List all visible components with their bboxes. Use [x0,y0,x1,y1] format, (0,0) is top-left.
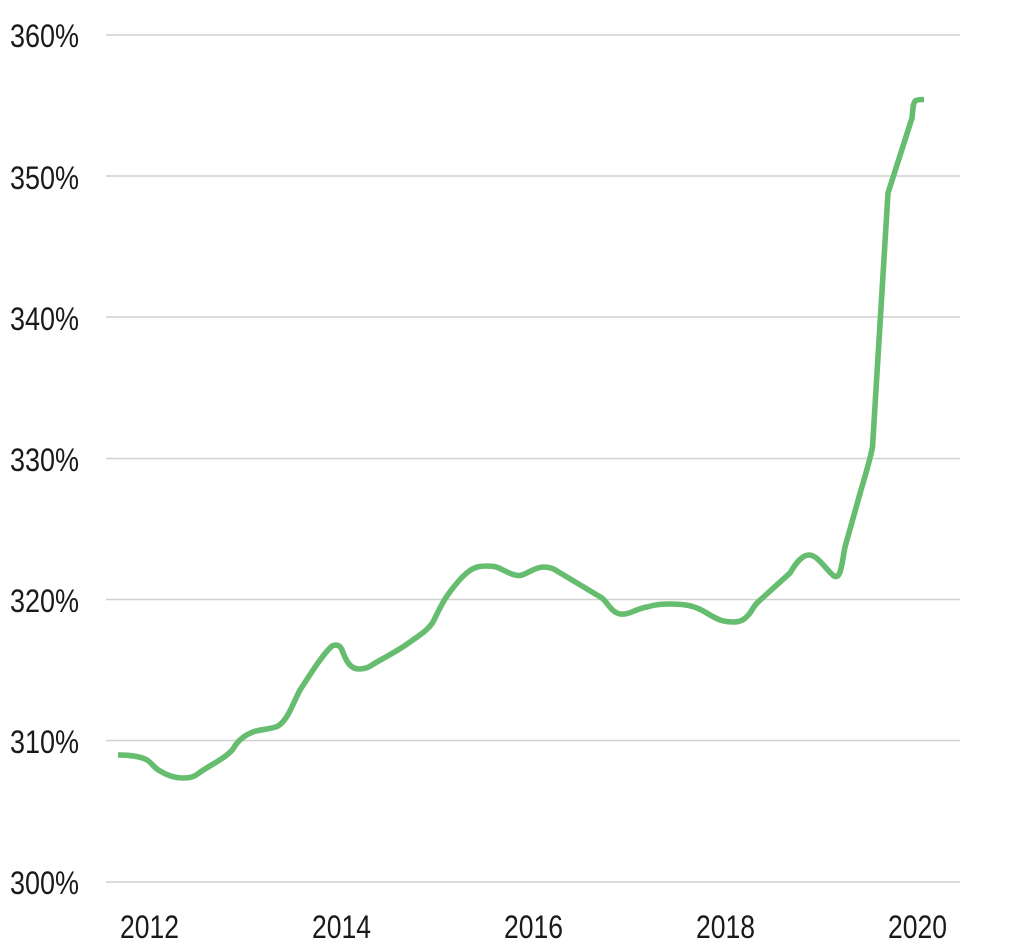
y-axis labels: 360% [10,18,79,54]
data line [118,100,924,778]
x-axis labels: 2014 [312,909,371,945]
x-axis labels: 2012 [120,909,179,945]
x-axis labels: 2018 [696,909,755,945]
y-axis labels: 300% [10,865,79,901]
x-axis labels: 2020 [888,909,947,945]
x-axis labels: 2016 [504,909,563,945]
y-axis labels: 340% [10,301,79,337]
y-axis labels: 320% [10,583,79,619]
y-axis labels: 330% [10,442,79,478]
y-axis labels [10,18,79,901]
y-axis labels: 310% [10,724,79,760]
y-axis labels: 350% [10,160,79,196]
x-axis labels [120,909,947,945]
